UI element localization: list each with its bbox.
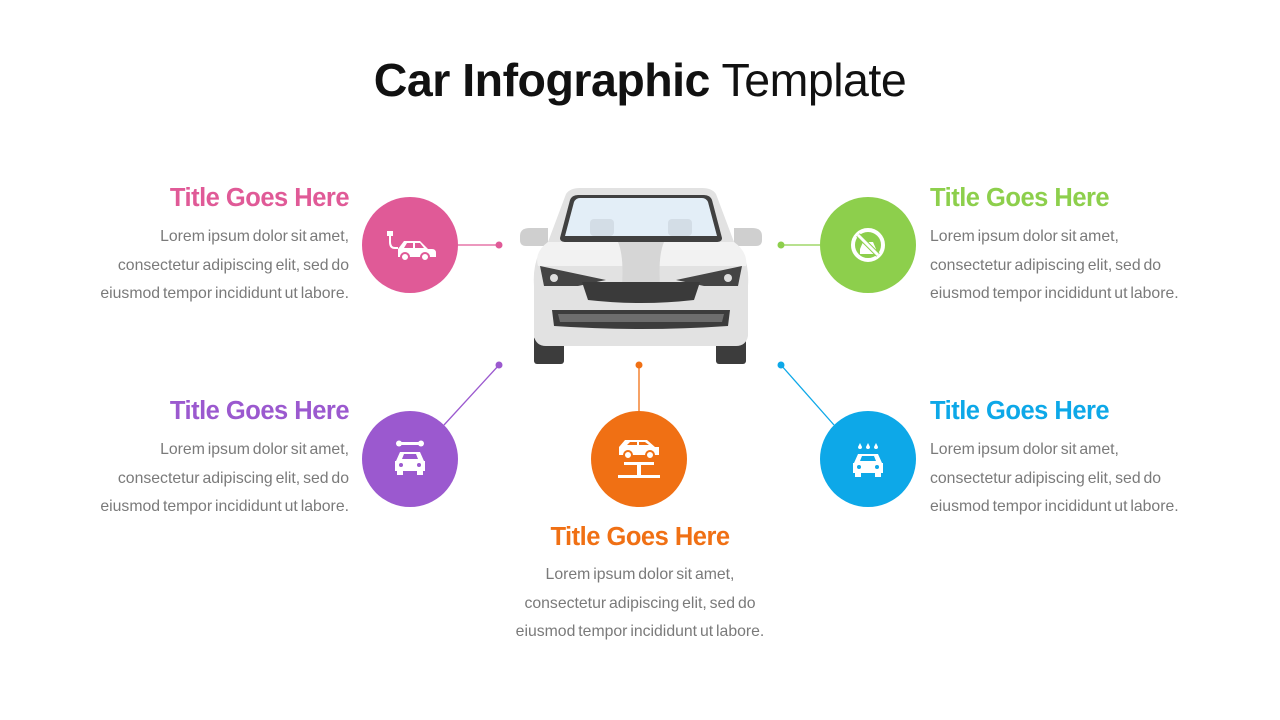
text block: consectetur adipiscing elit, sed do [524,594,756,612]
text block [100,228,349,302]
title: Car Infographic Template [374,54,906,106]
icon: EV charging car [362,197,458,293]
text block: Lorem ipsum dolor sit amet, [546,566,734,583]
text block: eiusmod tempor incididunt ut labore. [100,285,349,302]
heading: Title Goes Here [930,184,1109,212]
text block [930,441,1179,515]
panel: pink [100,184,458,302]
text block [100,441,349,515]
text block: Lorem ipsum dolor sit amet, [160,228,349,245]
panel: purple [100,397,458,515]
text block [930,228,1179,302]
heading: Title Goes Here [930,397,1109,425]
text block: Lorem ipsum dolor sit amet, [160,441,349,458]
heading: Title Goes Here [170,184,349,212]
heading: Title Goes Here [550,523,730,551]
text block: consectetur adipiscing elit, sed do [118,470,349,486]
icon: car lift [591,411,687,507]
text block: consectetur adipiscing elit, sed do [118,256,349,274]
icon: no car [820,197,916,293]
text block: eiusmod tempor incididunt ut labore. [516,623,764,640]
text block: eiusmod tempor incididunt ut labore. [930,285,1179,302]
text block: Lorem ipsum dolor sit amet, [930,441,1119,458]
icon: car repair wrench [362,411,458,507]
text block [516,566,764,640]
text block: eiusmod tempor incididunt ut labore. [100,498,349,515]
panel: green [820,184,1179,302]
heading: Title Goes Here [170,397,349,425]
panel: blue [820,397,1179,515]
text block: eiusmod tempor incididunt ut labore. [930,498,1179,515]
text block: consectetur adipiscing elit, sed do [930,256,1161,274]
panel: orange [516,411,764,640]
text block: consectetur adipiscing elit, sed do [930,470,1161,486]
car illustration [520,188,762,364]
text block: Lorem ipsum dolor sit amet, [930,228,1119,245]
icon: car wash [820,411,916,507]
